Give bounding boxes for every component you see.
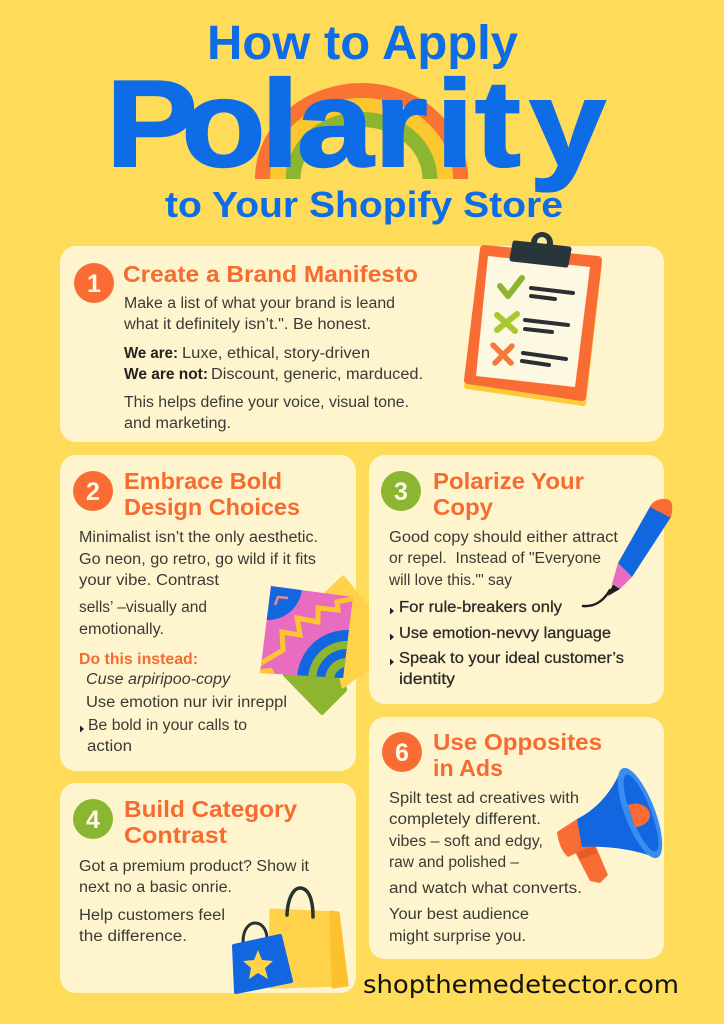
number badge 4	[73, 799, 113, 839]
body text: the difference.	[79, 928, 187, 945]
body text: sells’ –visually and	[79, 599, 207, 616]
title block	[106, 17, 606, 225]
body text: Luxe, ethical, story-driven	[182, 345, 370, 362]
icon: megaphone	[557, 763, 671, 883]
body text: Make a list of what your brand is leand	[124, 295, 395, 312]
list: Use emotion nur ivir inreppl	[86, 694, 287, 711]
number badge 3	[381, 471, 421, 511]
body text: Got a premium product? Show it	[79, 858, 310, 875]
number badge 1: 1	[87, 270, 101, 298]
body text: This helps define your voice, visual tone.	[124, 394, 409, 411]
list: Cuse arpiripoo-copy	[86, 671, 231, 688]
number badge 4: 4	[86, 806, 100, 834]
icon: clipboard checklist	[467, 232, 599, 403]
body text: Help customers feel	[79, 907, 225, 924]
body text: Good copy should either attract	[389, 529, 619, 546]
number badge 6: 6	[395, 739, 409, 767]
icon: marker pen	[583, 499, 672, 606]
body text: raw and polished –	[389, 854, 519, 871]
body text: next no a basic onrie.	[79, 879, 232, 896]
panel 4: category contrast	[60, 783, 356, 993]
heading	[124, 796, 297, 848]
body text	[79, 529, 318, 638]
body text: emotionally.	[79, 621, 164, 638]
heading	[433, 729, 602, 781]
heading: Polarize Your	[433, 468, 584, 494]
heading: Use Opposites	[433, 729, 602, 755]
body text: or repel. Instead of "Everyone	[389, 550, 601, 567]
icon: rainbow	[262, 91, 460, 179]
body text: We are:	[124, 345, 178, 362]
body text: Go neon, go retro, go wild if it fits	[79, 551, 316, 568]
body text: might surprise you.	[389, 928, 526, 945]
title word: Polarity: Polarity	[106, 55, 606, 192]
body text: Your best audience	[389, 906, 529, 923]
heading: Create a Brand Manifesto	[123, 261, 418, 287]
bullet list	[390, 599, 624, 688]
number badge 1	[74, 263, 114, 303]
number badge 6	[382, 732, 422, 772]
list	[80, 671, 287, 755]
body text	[388, 529, 619, 589]
number badge 2: 2	[86, 478, 100, 506]
panel 1: brand manifesto	[60, 232, 664, 442]
title line: How to Apply: How to Apply	[207, 17, 518, 70]
heading	[124, 468, 300, 520]
body text: Minimalist isn’t the only aesthetic.	[79, 529, 318, 546]
list: action	[87, 738, 132, 755]
bullet list: Speak to your ideal customer’s	[399, 650, 624, 667]
panel 3: polarize copy	[369, 455, 672, 704]
icon: shopping bags	[234, 888, 347, 992]
body text	[389, 790, 582, 945]
body text: We are not:	[124, 366, 208, 383]
heading: Copy	[433, 494, 493, 520]
heading: Design Choices	[124, 494, 300, 520]
subheading: Do this instead:	[79, 651, 198, 668]
list: Be bold in your calls to	[88, 717, 247, 734]
number badge 2	[73, 471, 113, 511]
body text: and marketing.	[124, 415, 231, 432]
body text: vibes – soft and edgy,	[389, 833, 543, 850]
bullet list: For rule-breakers only	[399, 599, 562, 616]
body text	[123, 295, 423, 432]
footer website address: shopthemedetector.com	[363, 970, 679, 999]
heading: in Ads	[433, 755, 503, 781]
heading: Contrast	[124, 822, 227, 848]
bullet list: identity	[399, 671, 455, 688]
heading: Build Category	[124, 796, 297, 822]
icon: colourful art cards	[260, 575, 369, 716]
body text: Spilt test ad creatives with	[389, 790, 579, 807]
body text: and watch what converts.	[389, 880, 582, 897]
body text: Discount, generic, marduced.	[211, 366, 423, 383]
body text: will love this."' say	[388, 572, 512, 589]
title line: to Your Shopify Store: to Your Shopify Store	[165, 184, 563, 225]
panel 2: bold design choices	[60, 455, 397, 771]
bullet list: Use emotion-nevvy language	[399, 625, 611, 642]
body text: your vibe. Contrast	[79, 572, 220, 589]
heading	[433, 468, 584, 520]
heading: Embrace Bold	[124, 468, 282, 494]
body text: what it definitely isn’t.". Be honest.	[123, 316, 371, 333]
body text: completely different.	[389, 811, 541, 828]
panel 6: opposites in ads	[369, 717, 671, 959]
body text	[79, 858, 310, 945]
number badge 3: 3	[394, 478, 408, 506]
